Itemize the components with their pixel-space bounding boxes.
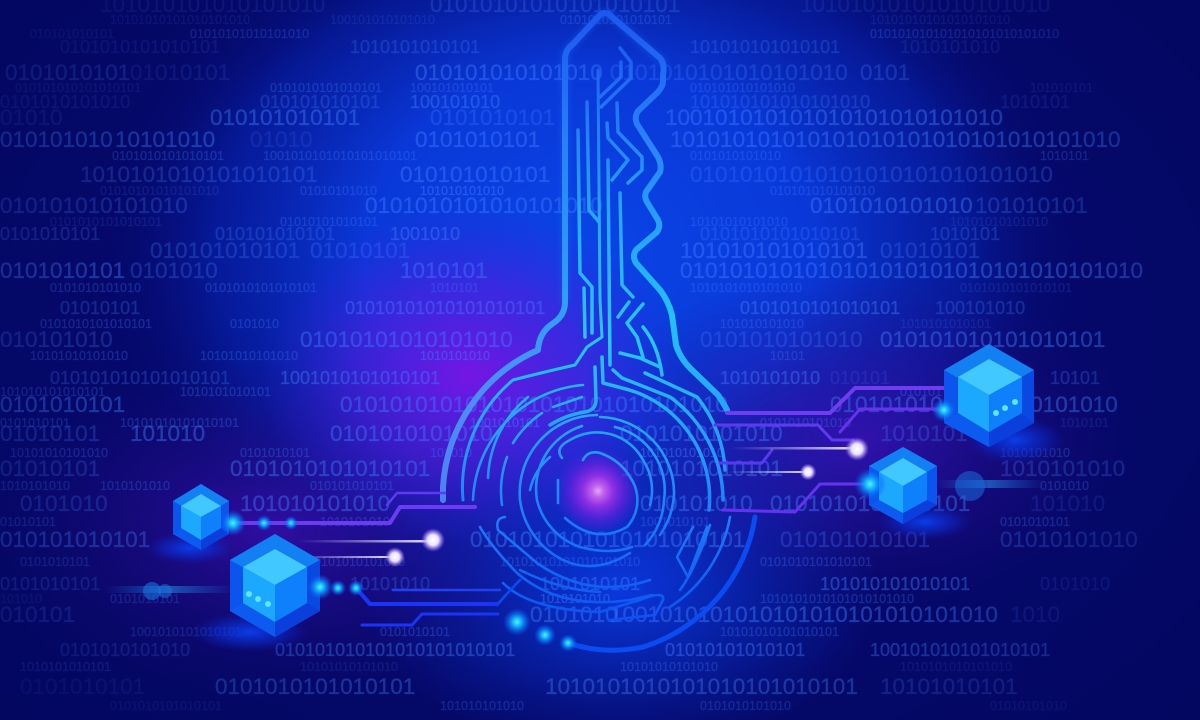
binary code background: 01010 <box>0 105 63 130</box>
binary code background: 100101010101010 <box>330 13 435 27</box>
binary code background: 010101010101 <box>30 27 114 41</box>
binary code background: 100101010101010 <box>300 555 405 569</box>
binary code background: 01010101010101010101 <box>345 298 545 318</box>
cyan glow nodes <box>220 398 956 652</box>
binary code background: 100101010101010101010101010 <box>665 105 1003 130</box>
binary code background: 010101 <box>0 602 75 627</box>
binary code background: 0101010 <box>1040 574 1110 594</box>
binary code background: 1010101010101010101010101 <box>545 674 858 699</box>
binary code background: 0101010101010 <box>700 699 791 713</box>
binary code background: 10101010101010101010 <box>110 13 250 27</box>
binary code background: 1010101 <box>1000 92 1070 112</box>
binary code background: 10101010 <box>115 127 215 152</box>
binary code background: 0101010101010101010101010101010101010 <box>680 258 1143 283</box>
white node right large <box>845 437 869 461</box>
haze beam left <box>105 582 235 600</box>
binary code background: 010101010101010 <box>770 184 875 198</box>
binary code background: 0101010101010101 <box>215 674 415 699</box>
binary code background: 101010101 <box>1030 81 1093 95</box>
binary code background: 0101010101 <box>20 555 90 569</box>
binary code background: 0101010101010101 <box>560 13 672 27</box>
binary code background: 0101010 <box>530 602 618 627</box>
binary code background: 010101010101 <box>400 162 550 187</box>
binary code background: 0101010101010101 <box>770 491 970 516</box>
binary code background: 10101010101010101010 <box>500 555 640 569</box>
binary code background: 1010 <box>1010 602 1060 627</box>
binary code background: 1001010101 <box>470 416 540 430</box>
binary code background: 0101010101010 <box>0 92 130 112</box>
binary code background: 101010101010 <box>420 184 504 198</box>
binary code background: 0101010101 <box>110 592 180 606</box>
binary code background: 01010101 <box>310 238 410 263</box>
binary code background: 0101010101010 <box>330 421 493 446</box>
binary code background: 01010101010 <box>300 184 377 198</box>
binary code background: 101010101010 <box>240 491 390 516</box>
binary code background: 01010101 <box>130 60 230 85</box>
binary code background: 0101010101010101 <box>760 555 872 569</box>
far trace <box>393 589 500 591</box>
white node left large <box>421 528 445 552</box>
center glow <box>554 447 642 535</box>
binary code background: 1001010 <box>390 224 460 244</box>
key outline right and teeth <box>605 13 727 410</box>
binary code background: 010101010101010 <box>415 60 603 85</box>
binary code background: 01010101 <box>880 238 980 263</box>
cube: small left <box>173 484 229 550</box>
binary code background: 1010101010101 <box>620 456 783 481</box>
cube: middle right <box>869 447 937 524</box>
binary code background: 010101010101010101 <box>880 327 1105 352</box>
binary code background: 0101010101 <box>380 625 450 639</box>
binary code background: 10101010101010 <box>950 215 1048 229</box>
binary code background: 0101010101010101 <box>270 81 382 95</box>
cube indicator dots <box>993 399 1018 416</box>
binary code background: 01010101 <box>0 421 100 446</box>
binary code background: 0101010101010101 <box>40 317 152 331</box>
binary code background: 10101010101010 <box>300 660 398 674</box>
binary code background: 0101010101010101 <box>960 281 1072 295</box>
binary code background: 01010101010 <box>1000 527 1138 552</box>
binary code background: 010101 <box>830 368 890 388</box>
binary code background: 101010101010101010101010101010101010 <box>670 127 1120 152</box>
binary code background: 1010101010101010 <box>690 281 802 295</box>
binary code background: 1010101 <box>1060 416 1109 430</box>
binary code background: 010101010101 <box>215 224 335 244</box>
key <box>443 13 755 650</box>
binary code background: 0101010 <box>20 491 108 516</box>
binary code background: 0101010101010101010 <box>610 60 848 85</box>
key outline left <box>443 13 605 500</box>
binary code background: 01010101 <box>0 456 100 481</box>
lower trace <box>362 614 498 625</box>
binary code background: 010101010101010 <box>0 193 188 218</box>
binary code background: 01010101010101 <box>280 215 378 229</box>
binary code background: 0101010101 <box>240 446 310 460</box>
binary code background: 101010101010101 <box>820 574 970 594</box>
cube indicator dots <box>246 591 271 607</box>
binary code background: 101010 <box>130 421 205 446</box>
glow under cubes <box>145 416 1065 652</box>
binary code background: 0101010101010 <box>690 149 781 163</box>
binary code background: 0101010101 <box>0 224 100 244</box>
binary code background: 1010101 <box>880 421 968 446</box>
binary code background: 1010101 <box>430 281 479 295</box>
binary code background: 101010101010101010 <box>690 92 870 112</box>
white light lines right <box>727 447 857 473</box>
binary code background: 0101010101 <box>0 574 100 594</box>
binary code background: 0101010101 <box>0 392 125 417</box>
binary code background: 010101010101010 <box>690 81 795 95</box>
binary code background: 0101010101010 <box>60 640 190 660</box>
binary code background: 010101010101010101010101010 <box>870 27 1059 41</box>
binary code background: 1001010101010101010101 <box>263 149 417 163</box>
binary code background: 01010101010101010101010 <box>830 392 1118 417</box>
binary code background: 10101010101 <box>880 674 1018 699</box>
binary code background: 10101010101010101 <box>720 625 839 639</box>
binary code background: 01010101010 <box>990 699 1067 713</box>
binary code background: 1010101 <box>400 258 488 283</box>
binary code background: 0101010101010 <box>810 193 973 218</box>
binary code background: 0101010101010101 <box>205 281 317 295</box>
binary code background: 1001010101010101 <box>130 625 242 639</box>
white node right small <box>800 464 816 480</box>
fourth trace <box>720 450 772 463</box>
binary code background: 01010 <box>250 127 313 152</box>
binary code background: 10101010101010101 <box>120 416 239 430</box>
binary code background: 010101010101010101 <box>50 368 230 388</box>
binary code background: 010101010 <box>0 327 113 352</box>
binary code background: 1010101010101 <box>900 317 991 331</box>
binary code background: 10101010101010 <box>10 446 108 460</box>
binary code background: 100101010 <box>410 92 500 112</box>
binary code background: 101010101010 <box>720 317 804 331</box>
binary code background: 01010101010101010 <box>100 184 219 198</box>
binary code background: 0101010 <box>130 258 218 283</box>
binary code background: 01010101010101010 <box>300 327 513 352</box>
binary code background: 10101010101010 <box>200 349 298 363</box>
binary code background: 100101010101 <box>410 81 494 95</box>
upper short trace <box>387 493 445 505</box>
binary code background: 100101010 <box>935 298 1025 318</box>
binary code background: 1010101010 <box>720 368 820 388</box>
binary code background: 0101010101010 <box>700 327 863 352</box>
binary code background: 1010101010101 <box>180 385 271 399</box>
bow ring traces <box>473 385 730 620</box>
shaft circuit traces <box>462 48 725 510</box>
white node left small <box>385 547 405 567</box>
binary code background: 0101010101010101 <box>112 149 224 163</box>
binary code background: 0101010101010101010101 <box>470 527 745 552</box>
binary code background: 1010101010101010101010 <box>760 592 914 606</box>
binary code background: 0101010101010101 <box>50 215 162 229</box>
binary code background: 0101010101 <box>0 416 70 430</box>
binary code background: 01010101 <box>0 515 56 529</box>
binary code background: 1010101010 <box>420 349 490 363</box>
binary code background: 0101010101 <box>0 258 125 283</box>
binary code background: 0101010101010101 <box>230 456 430 481</box>
binary code background: 10101 <box>1050 368 1100 388</box>
binary code background: 10101010 <box>350 574 430 594</box>
binary code background: 10101010101010 <box>690 215 788 229</box>
cube: large left <box>230 534 320 637</box>
binary code background: 0101010101010101 <box>60 37 220 57</box>
binary code background: 1010101010 <box>1000 456 1125 481</box>
white light lines left <box>287 540 433 558</box>
binary code background: 1001010101010101010101010101010 <box>610 602 998 627</box>
binary code background: 1010101010101 <box>20 660 111 674</box>
binary code background: 010101010101 <box>780 527 930 552</box>
binary code background: 101010 <box>1030 491 1105 516</box>
binary code background: 1010101 <box>1040 149 1089 163</box>
binary code background: 1010101 <box>930 224 1000 244</box>
binary code background: 10101010101010 <box>30 349 128 363</box>
trace from big cube <box>356 588 497 604</box>
trace from small cube <box>233 507 475 523</box>
key bottom outer arc <box>568 517 755 650</box>
binary code background: 010101010 <box>640 491 753 516</box>
cube: top right <box>944 344 1034 447</box>
binary code background: 1010101010 <box>540 592 610 606</box>
haze beam right <box>935 471 1045 501</box>
binary code background: 1010101010 <box>1000 446 1070 460</box>
binary code background: 010101010101010101 <box>15 81 141 95</box>
binary code background: 0101010101 <box>430 105 555 130</box>
binary code background: 0101010101010 <box>620 421 783 446</box>
binary code background: 010101010101010101010101 <box>275 640 515 660</box>
binary code background: 0101010101010101 <box>700 224 860 244</box>
binary code background: 1001010101 <box>540 574 640 594</box>
binary code background: 101010101010 <box>440 699 524 713</box>
binary code background: 101010 <box>0 592 42 606</box>
binary code background: 0101010101010101010101010101010 <box>340 392 728 417</box>
fifth trace to lower cube <box>723 484 870 512</box>
second trace to cube <box>840 409 940 432</box>
binary code background: 010101010101 <box>260 92 380 112</box>
third trace to node <box>715 425 853 440</box>
binary code background: 0101010101010 <box>50 281 141 295</box>
binary code background: 0101010101010101 <box>110 699 222 713</box>
circuit lines right <box>715 388 944 512</box>
binary code background: 1010101010 <box>320 515 390 529</box>
binary code background: 1001010101010101 <box>280 368 440 388</box>
binary code background: 101010101010101 <box>690 37 840 57</box>
binary code background: 101010 <box>430 446 472 460</box>
binary code background: 101010101010101 <box>0 385 105 399</box>
binary code background: 1010101010101 <box>350 37 480 57</box>
binary code background: 10101010101010 <box>620 660 718 674</box>
upper trace to cube <box>727 388 944 413</box>
binary code background: 010101010101 <box>150 238 300 263</box>
binary code background: 01010101010101 <box>665 640 805 660</box>
binary code background: 010101 <box>900 385 942 399</box>
binary code background: 010101010101 <box>210 105 360 130</box>
binary code background: 10101010101010101010 <box>870 13 1010 27</box>
binary code background: 0101010101 <box>5 60 130 85</box>
binary code background: 0101 <box>860 60 910 85</box>
binary code background: 1001010101 <box>640 515 710 529</box>
binary code background: 1010101010 <box>900 37 1000 57</box>
binary code background: 101010101 <box>975 193 1088 218</box>
binary code background: 0101010101 <box>415 127 540 152</box>
binary code background: 101010101010101 <box>680 238 868 263</box>
binary code background: 1010101010101010101 <box>80 162 318 187</box>
binary code background: 01010101 <box>60 298 140 318</box>
binary code background: 1010101010 <box>0 479 70 493</box>
binary code background: 010101010 <box>0 127 113 152</box>
binary code background: 10101 <box>770 349 805 363</box>
binary code background: 01010101010101010 <box>190 27 309 41</box>
binary code background: 0101010101010 <box>760 416 851 430</box>
circuit lines left <box>233 493 500 625</box>
binary code background: 010101010101 <box>0 527 150 552</box>
binary code background: 0101010101010101010 <box>365 193 603 218</box>
binary code background: 1010101010 <box>100 479 170 493</box>
binary code background: 0101010101 <box>20 674 145 699</box>
binary code background: 0101010 <box>1040 479 1089 493</box>
binary code background: 0101010101010101 <box>740 298 900 318</box>
binary code background: 100101010101010101 <box>870 640 1050 660</box>
binary code background: 0101010 <box>230 317 279 331</box>
binary code background: 01010101010101010101010101010 <box>690 162 1053 187</box>
binary code background: 1010101010101010 <box>900 660 1012 674</box>
binary code background: 0101010101 <box>1000 515 1070 529</box>
binary code background: 010101010101 <box>310 479 394 493</box>
binary code background: 101010101010 <box>640 446 724 460</box>
key outline glow <box>565 14 663 300</box>
